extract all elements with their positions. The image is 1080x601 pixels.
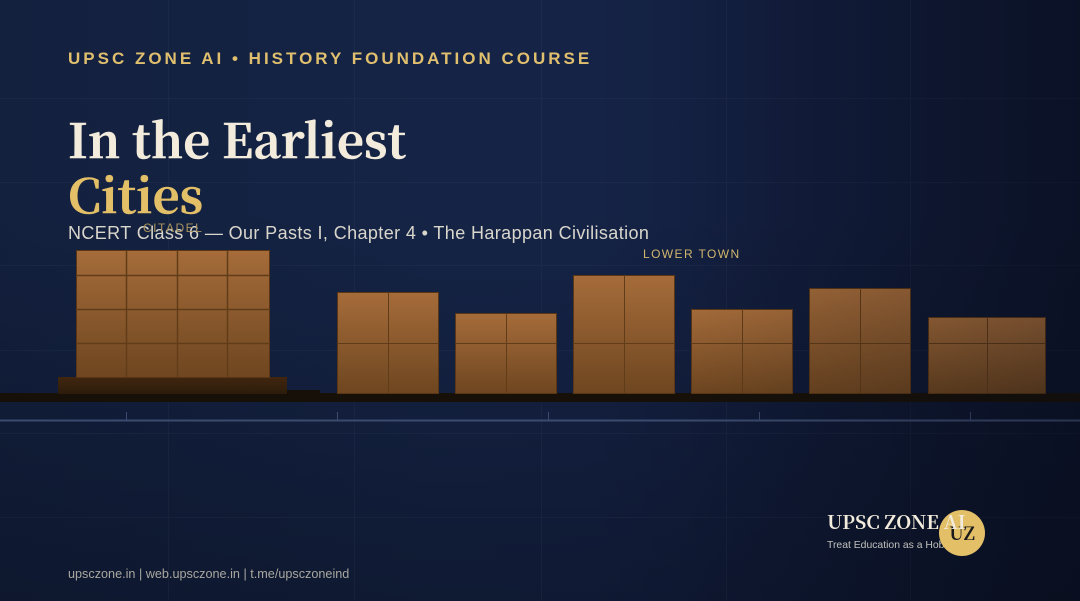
- citadel: [58, 250, 287, 394]
- label: citadel: CITADEL: [143, 221, 203, 235]
- lower town house 2: [455, 313, 557, 394]
- lower town house 1: [337, 292, 439, 394]
- lower town house 4: [691, 309, 793, 394]
- title: In the Earliest: [68, 105, 406, 172]
- subtitle: NCERT Class 6 — Our Pasts I, Chapter 4 • The Harappan Civilisation: [68, 223, 649, 243]
- title: Cities: [68, 160, 203, 227]
- brand tagline: Treat Education as a Hobby: [827, 540, 955, 551]
- brand block: [827, 508, 985, 556]
- ground: [0, 390, 1080, 402]
- logo badge: UZ: [949, 520, 975, 546]
- lower town house 3: [573, 275, 675, 394]
- brand name: UPSC ZONE AI: [827, 508, 966, 535]
- lower town house 5: [809, 288, 911, 394]
- footer links: upsczone.in | web.upsczone.in | t.me/upsczoneind: [68, 567, 349, 581]
- lower town house 6: [928, 317, 1046, 394]
- label: lower town: LOWER TOWN: [643, 247, 741, 261]
- logo badge: [939, 510, 985, 556]
- eyebrow heading: UPSC ZONE AI • HISTORY FOUNDATION COURSE: [68, 49, 592, 68]
- timeline with ticks: [0, 412, 1080, 422]
- title: [68, 105, 406, 227]
